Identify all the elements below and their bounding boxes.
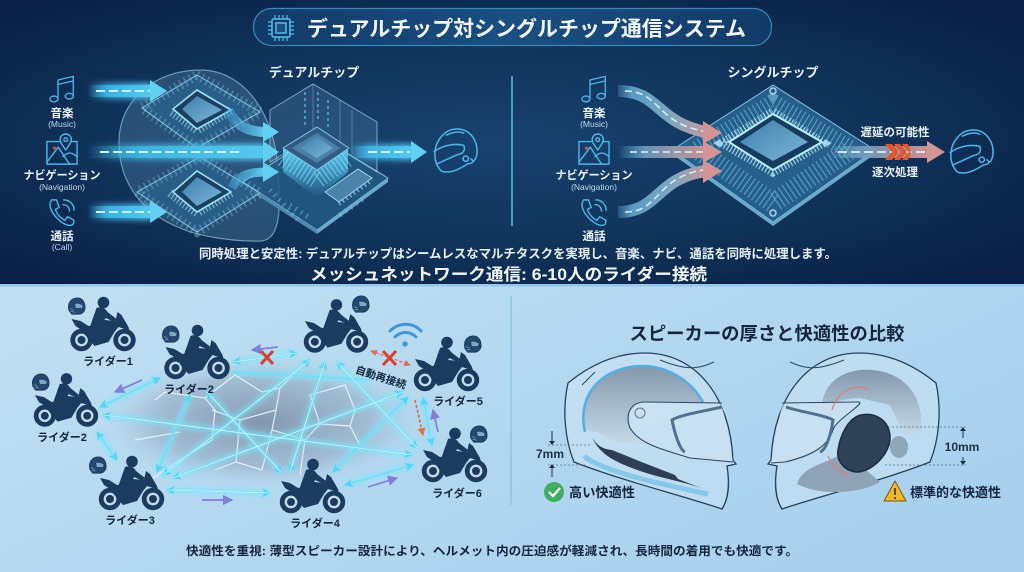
icon: navigation: [47, 134, 77, 164]
rider 2 left: ライダー2: [37, 430, 87, 444]
rider 1: ライダー1: [83, 354, 133, 368]
rider 5: ライダー5: [433, 394, 483, 408]
panel: single chip: [556, 65, 993, 243]
rider 4: [281, 459, 343, 530]
heading: single chip: シングルチップ: [727, 65, 819, 80]
label: possible delay: 遅延の可能性: [860, 125, 930, 139]
label: call: [50, 229, 74, 252]
circuit boards inside helmet: [137, 75, 260, 232]
arrow: navigation to main chip: [88, 141, 279, 163]
panel: mesh network: [32, 296, 487, 530]
badge: high comfort: 高い快適性: [569, 485, 635, 500]
caption: dual chip benefits: 同時処理と安定性: デュアルチップはシームレスなマルチタスクを実現し、音楽、ナビ、通話を同時に処理します。: [199, 246, 837, 261]
arrow: dual output to helmet: [350, 141, 427, 163]
secondary chip: [325, 169, 372, 202]
broken link: riders 2 to top: [261, 351, 273, 364]
rider 5: [415, 336, 483, 408]
rider 1: [68, 297, 133, 368]
rider 6: ライダー6: [432, 486, 482, 500]
icon: delay chevrons: [885, 144, 911, 160]
helmet: thin speaker: [565, 353, 736, 509]
circuit board: single: [672, 85, 875, 226]
label: call: 通話: [50, 229, 74, 243]
rider 3: [89, 456, 162, 527]
icon: navigation: [579, 134, 609, 164]
icon: chip: [268, 15, 294, 41]
icon: helmet output: [434, 129, 477, 172]
rider 2 left: [32, 373, 96, 444]
divider: [511, 76, 513, 226]
arrow: single output with delay: [830, 141, 945, 163]
arrow: lower chip output: [232, 162, 279, 188]
rider 3: ライダー3: [105, 513, 155, 527]
divider lower: [510, 296, 512, 505]
label: music: (Music): [48, 119, 76, 129]
label: music: [48, 106, 76, 129]
rider top centre: [305, 296, 369, 350]
arrow: call to chip: [88, 201, 167, 223]
icon: phone: [50, 200, 74, 225]
heading: comparison: スピーカーの厚さと快適性の比較: [630, 324, 904, 344]
dimension: 10mm: [885, 427, 979, 465]
badge: high comfort: [544, 482, 635, 502]
rider 2 upper: [162, 325, 227, 396]
helmet shell: [119, 70, 279, 241]
icon: wifi: [390, 324, 421, 346]
icon: music: [50, 76, 73, 102]
label: navigation: [556, 168, 632, 192]
icon: music: [582, 76, 605, 102]
label: navigation: [24, 168, 100, 192]
label: sequential processing: 逐次処理: [872, 165, 918, 179]
label: call: (Call): [52, 242, 72, 252]
label: auto reconnect: 自動再接続: [354, 363, 408, 392]
panel: speaker comparison: [536, 324, 1001, 509]
helmet: thick speaker: [768, 353, 939, 509]
rider 4: ライダー4: [290, 516, 341, 530]
caption: comfort: 快適性を重視: 薄型スピーカー設計により、ヘルメット内の圧迫感が軽減され、長時間の着用でも快適です。: [186, 543, 798, 558]
icon: helmet output: [950, 130, 993, 173]
title banner: [254, 8, 772, 46]
thin speaker: [592, 437, 706, 490]
dimension: 7mm: [536, 431, 592, 477]
label: music: 音楽: [582, 106, 606, 120]
broken link: top to rider 5: [371, 351, 410, 365]
mesh connections: [97, 353, 432, 493]
badge: standard comfort: [884, 481, 1001, 501]
panel: dual chip: [24, 65, 477, 252]
dimension: 10mm: 10mm: [945, 440, 979, 454]
glass cube: [270, 84, 377, 172]
panel edge: [0, 284, 1024, 286]
label: music: [580, 106, 608, 129]
icon: phone: [582, 200, 606, 225]
label: music: 音楽: [50, 106, 74, 120]
panel: light lower background: [0, 285, 1024, 572]
label: navigation: (Navigation): [571, 182, 617, 192]
heading: mesh network: メッシュネットワーク通信: 6-10人のライダー接続: [310, 264, 708, 284]
arrow: music to chip: [88, 80, 167, 102]
title text: デュアルチップ対シングルチップ通信システム: [307, 17, 746, 41]
panel: dark upper background: [0, 0, 1024, 285]
data flow arrows purple: [115, 347, 438, 500]
label: call: 通話: [582, 229, 606, 243]
thick speaker: [838, 414, 890, 472]
heading: dual chip: デュアルチップ: [269, 65, 359, 80]
main chip: [283, 148, 348, 198]
input sources left: [24, 76, 100, 252]
label: music: (Music): [580, 119, 608, 129]
rider 6: [423, 426, 487, 500]
rider 2 upper: ライダー2: [164, 382, 214, 396]
mesh hexagon surface: [97, 354, 427, 490]
circuit board: main: [243, 84, 388, 234]
arrows: three inputs to single chip: [618, 91, 722, 212]
badge: standard comfort: 標準的な快適性: [910, 485, 1001, 500]
arrow: upper chip output: [228, 110, 279, 142]
label: navigation: ナビゲーション: [24, 168, 100, 182]
dashed reconnect arrow: [415, 400, 423, 435]
dimension: 7mm: 7mm: [536, 447, 564, 461]
label: navigation: (Navigation): [39, 182, 85, 192]
label: navigation: ナビゲーション: [556, 168, 632, 182]
input sources right: [556, 76, 632, 243]
